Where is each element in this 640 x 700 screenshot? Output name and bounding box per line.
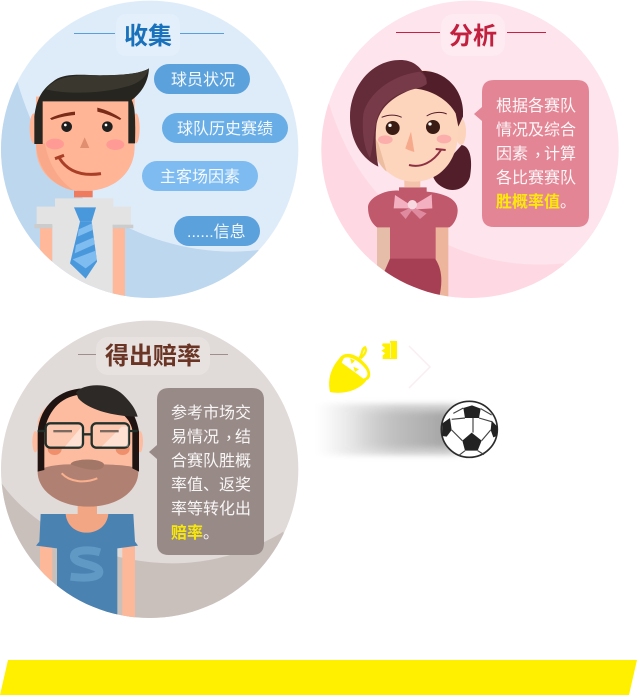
character: bearded man with glasses	[32, 385, 143, 622]
speech bubble: odds text	[149, 388, 264, 555]
heading: 分析: 分析	[449, 23, 497, 50]
panel: odds	[0, 315, 310, 632]
character: man with tie	[30, 68, 149, 300]
speech bubble: analysis text: 根据各赛队	[496, 96, 576, 115]
heading: 分析	[396, 14, 546, 56]
speech bubble: analysis text: 因素	[496, 146, 528, 163]
yellow footer banner	[0, 660, 637, 695]
speech bubble: odds text: 参考市场交	[171, 404, 251, 422]
speech bubble: analysis text: 胜概率值。	[496, 192, 576, 211]
speech bubble: analysis text: 各比赛赛队	[496, 168, 576, 187]
speech bubble: odds text: 结	[235, 428, 251, 446]
icon: soccer ball	[441, 401, 497, 457]
chip: player status: 球员状况	[171, 71, 235, 89]
speech bubble: analysis text: 情况及综合	[496, 121, 576, 139]
speech bubble: odds text: 率值、返奖	[171, 476, 251, 494]
motion trail	[318, 404, 458, 455]
character: woman with bow	[350, 60, 471, 300]
chip: team history	[162, 113, 288, 143]
panel: analyse	[315, 0, 625, 317]
speech bubble: odds text: 赔率。	[171, 523, 219, 542]
icon: yellow acorn logo	[329, 341, 397, 393]
speech bubble: analysis text	[474, 80, 589, 227]
panel: collect	[0, 0, 310, 317]
chip: more info	[174, 216, 260, 246]
panel 3 background	[0, 315, 310, 632]
heading: 收集	[74, 14, 224, 56]
chip: home and away	[142, 161, 258, 191]
speech bubble: analysis text: ，	[534, 143, 550, 160]
speech bubble: analysis text: 计算	[544, 144, 576, 163]
speech bubble: odds text: 合赛队胜概	[171, 451, 251, 470]
speech bubble: odds text: ，	[225, 426, 241, 443]
arrow: faint chevron	[409, 346, 430, 388]
chip: more info: ......信息	[187, 223, 246, 241]
heading: 得出赔率: 得出赔率	[105, 343, 201, 370]
chip: home and away: 主客场因素	[160, 168, 240, 186]
panel 2 background	[315, 0, 625, 317]
chip: player status	[154, 64, 250, 94]
speech bubble: odds text: 率等转化出	[171, 500, 251, 518]
panel 1 background	[0, 0, 310, 317]
chip: team history: 球队历史赛绩	[177, 119, 273, 138]
heading: 得出赔率	[78, 337, 228, 375]
speech bubble: odds text: 易情况	[171, 429, 219, 446]
heading: 收集: 收集	[124, 23, 172, 50]
